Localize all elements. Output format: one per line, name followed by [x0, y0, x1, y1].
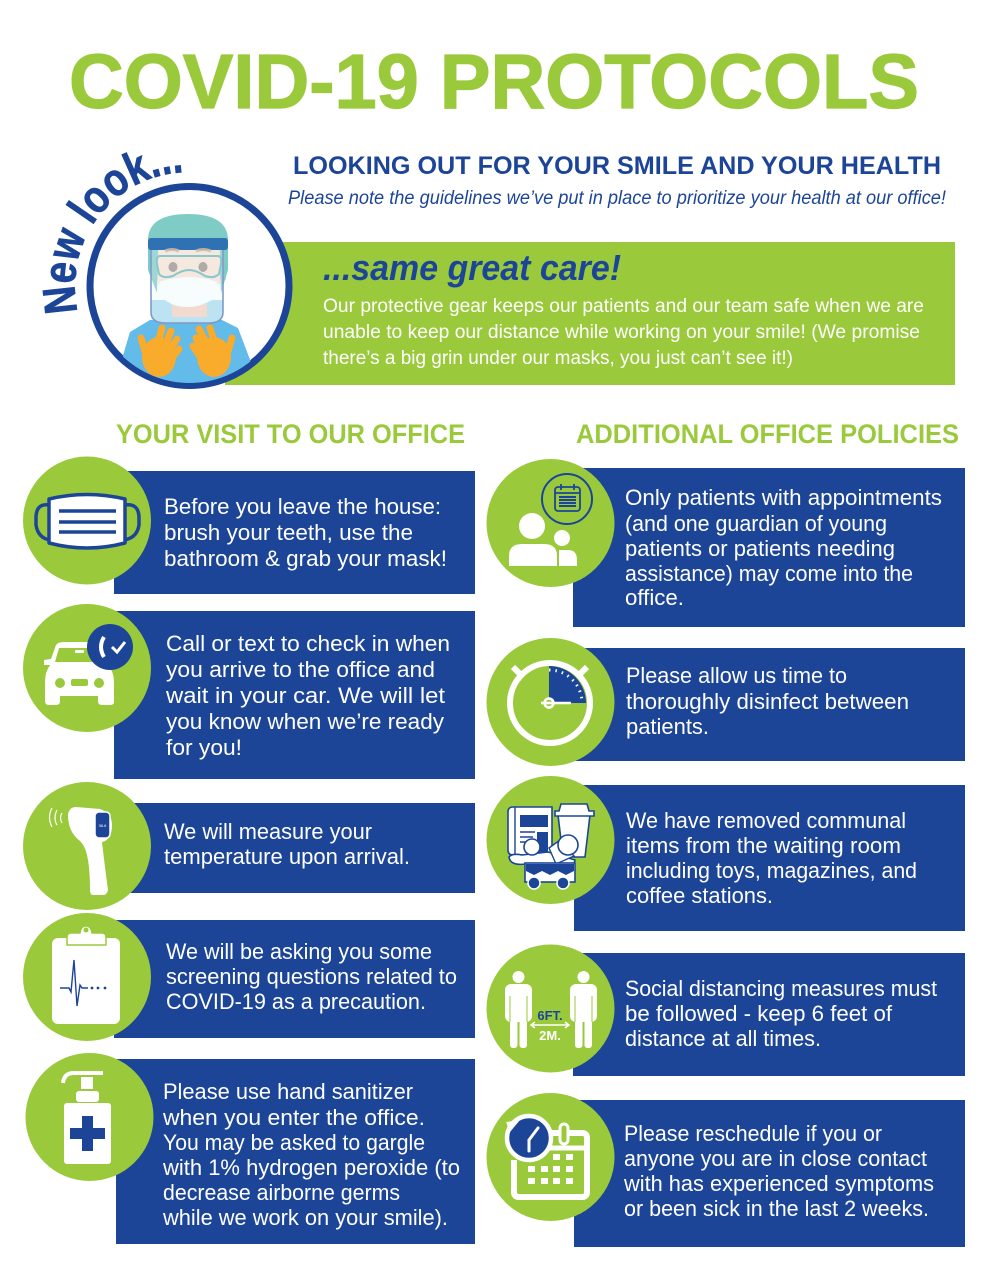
- text: Please allow us time to: [626, 663, 847, 688]
- protective gear text: Our protective gear keeps our patients and our team safe when we are: [323, 296, 924, 317]
- text: Please reschedule if you or: [624, 1121, 882, 1146]
- text: [162, 1079, 460, 1230]
- section heading: additional policies: ADDITIONAL OFFICE POLICIES: [576, 419, 959, 449]
- curved text: new look: New look...: [42, 152, 182, 314]
- icon: thermometer: 36.6: [99, 823, 107, 828]
- panel: communal items removed: [486, 776, 965, 931]
- text: decrease airborne germs: [163, 1180, 400, 1205]
- text: We will be asking you some: [166, 939, 432, 964]
- text: [625, 485, 942, 610]
- protective gear text: [323, 296, 924, 369]
- section heading: your visit: YOUR VISIT TO OUR OFFICE: [116, 419, 465, 449]
- text: [623, 1121, 934, 1221]
- icon: face mask: [36, 494, 139, 548]
- text: Before you leave the house:: [164, 494, 441, 519]
- text: We will measure your: [164, 819, 372, 844]
- text: thoroughly disinfect between: [626, 689, 909, 714]
- subheading: guidelines note: Please note the guidelines we’ve put in place to prioritize your health at our office!: [288, 188, 947, 209]
- text: items from the waiting room: [626, 833, 901, 858]
- protective gear text: unable to keep our distance while working on your smile! (We promise: [323, 322, 920, 343]
- text: Only patients with appointments: [625, 485, 942, 510]
- icon: masked healthcare worker: [90, 186, 289, 400]
- panel: hand sanitizer: [26, 1053, 475, 1244]
- text: patients.: [626, 714, 709, 739]
- same great care heading: ...same great care!: [323, 247, 621, 288]
- icon: two people six feet apart: 6FT.: [537, 1008, 563, 1023]
- icon: two people six feet apart: [505, 971, 597, 1048]
- protective gear text: there’s a big grin under our masks, you just can’t see it!): [323, 348, 793, 369]
- text: including toys, magazines, and: [626, 858, 917, 883]
- panel: disinfect time: [486, 638, 965, 766]
- text: distance at all times.: [625, 1026, 821, 1051]
- text: [164, 494, 447, 571]
- icon: sanitizer bottle: [63, 1073, 111, 1164]
- panel: screening questions: [23, 913, 475, 1041]
- text: [626, 808, 917, 908]
- icon: thermometer: [50, 807, 112, 895]
- text: Call or text to check in when: [166, 631, 450, 656]
- text: or been sick in the last 2 weeks.: [624, 1196, 929, 1221]
- text: with 1% hydrogen peroxide (to: [162, 1155, 460, 1180]
- text: [165, 631, 450, 760]
- text: for you!: [166, 735, 242, 760]
- text: coffee stations.: [626, 883, 773, 908]
- panel: before you leave: [23, 456, 475, 594]
- panel: reschedule: [486, 1093, 965, 1247]
- text: assistance) may come into the: [625, 561, 913, 586]
- text: bathroom & grab your mask!: [164, 546, 447, 571]
- icon: car with phone badge: [44, 624, 133, 705]
- text: be followed - keep 6 feet of: [625, 1001, 893, 1026]
- text: screening questions related to: [166, 964, 457, 989]
- text: [626, 663, 909, 739]
- text: You may be asked to gargle: [163, 1130, 425, 1155]
- text: you arrive to the office and: [166, 657, 435, 682]
- text: anyone you are in close contact: [624, 1146, 927, 1171]
- text: brush your teeth, use the: [164, 520, 413, 545]
- text: We have removed communal: [626, 808, 906, 833]
- text: Social distancing measures must: [625, 976, 937, 1001]
- icon: stopwatch: [510, 663, 590, 743]
- icon: calendar with clock: [506, 1116, 587, 1197]
- text: COVID-19 as a precaution.: [166, 989, 426, 1014]
- text: you know when we’re ready: [166, 709, 444, 734]
- panel: call or text: [23, 604, 475, 779]
- text: with has experienced symptoms: [623, 1171, 934, 1196]
- panel: same great care: [225, 242, 955, 385]
- panel: appointments: [486, 459, 965, 627]
- text: patients or patients needing: [625, 536, 895, 561]
- text: while we work on your smile).: [162, 1205, 448, 1230]
- icon: people with calendar: [509, 474, 592, 566]
- text: Please use hand sanitizer: [163, 1079, 413, 1104]
- text: [164, 819, 410, 869]
- text: [166, 939, 457, 1014]
- text: office.: [625, 585, 684, 610]
- text: [625, 976, 937, 1051]
- panel: temperature: [23, 782, 475, 910]
- icon: magazine, cup, toys and cart: [508, 804, 594, 889]
- heading: looking out for your smile: LOOKING OUT FOR YOUR SMILE AND YOUR HEALTH: [293, 152, 941, 180]
- icon: clipboard: [52, 926, 120, 1024]
- text: temperature upon arrival.: [164, 844, 410, 869]
- text: when you enter the office.: [162, 1105, 425, 1130]
- text: wait in your car. We will let: [165, 683, 445, 708]
- panel: social distancing: [486, 944, 965, 1076]
- text: (and one guardian of young: [625, 511, 887, 536]
- icon: two people six feet apart: 2M.: [539, 1028, 561, 1043]
- title: COVID-19 PROTOCOLS: [69, 39, 919, 125]
